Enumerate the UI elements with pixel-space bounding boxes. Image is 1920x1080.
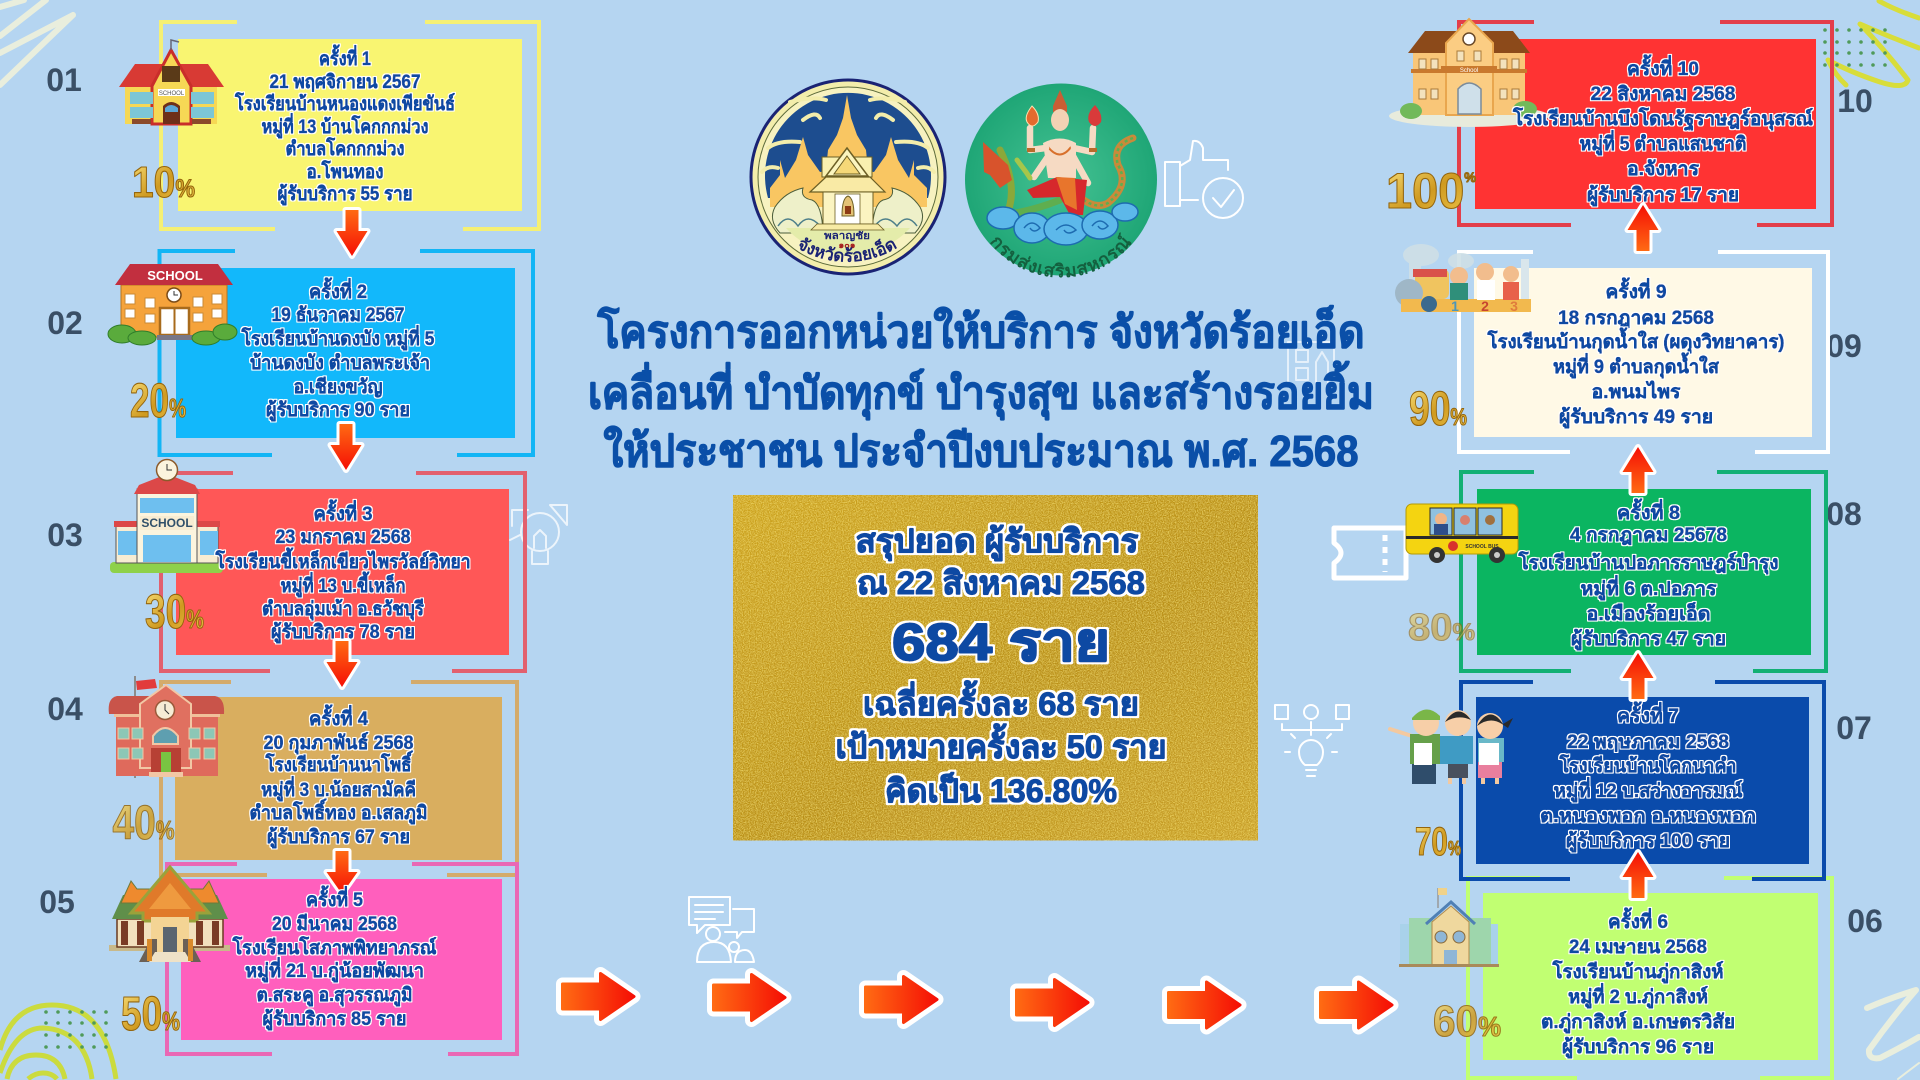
badge 40%: 40% <box>112 797 174 850</box>
badge 20%: 20% <box>130 375 186 428</box>
logo: Roi Et province seal <box>750 78 946 276</box>
title: โครงการออกหน่วยให้บริการ จังหวัดร้อยเอ็ด <box>597 305 1364 357</box>
panel 6 text: หมู่ที่ 2 บ.ภู่กาสิงห์ <box>1568 983 1708 1009</box>
icon: thumbs up with check <box>1165 141 1243 218</box>
panel 6 text <box>1541 907 1735 1059</box>
logo: Roi Et province seal: จังหวัดร้อยเอ็ด <box>800 237 897 262</box>
summary total: 684 ราย <box>892 614 1110 672</box>
logo: Roi Et province seal: พลาญชัย <box>824 230 870 242</box>
panel 2 text: โรงเรียนบ้านดงบัง หมู่ที่ 5 <box>241 325 435 351</box>
panel 2 text: 19 ธันวาคม 2567 <box>272 305 404 326</box>
panel 5 text: ผู้รับบริการ 85 ราย <box>262 1008 406 1031</box>
panel 5 text: โรงเรียนโสภาพพิทยาภรณ์ <box>232 936 437 959</box>
panel 6 text: โรงเรียนบ้านภู่กาสิงห์ <box>1552 960 1724 984</box>
number 02: 02 <box>47 305 83 341</box>
title: ให้ประชาชน ประจำปีงบประมาณ พ.ศ. 2568 <box>604 425 1358 476</box>
badge 70%: 70% <box>1415 820 1461 864</box>
panel 9 text: หมู่ที่ 9 ตำบลกุดน้ำใส <box>1553 352 1719 379</box>
number 03: 03 <box>47 517 83 553</box>
panel 9 box <box>1459 252 1828 452</box>
icon: school bus <box>1406 504 1518 563</box>
panel 2 text <box>241 277 435 422</box>
icon: train with children: 3 <box>1510 298 1518 314</box>
arrow: 6 to 7 <box>1622 852 1654 898</box>
icon: people chat <box>689 897 754 962</box>
panel 10 text <box>1512 54 1813 207</box>
panel 1 text: ครั้งที่ 1 <box>319 44 371 70</box>
panel 5 text: ต.สระคู อ.สุวรรณภูมิ <box>256 985 412 1007</box>
icon: school 1 <box>119 40 224 124</box>
arrow: right 1 <box>562 974 634 1020</box>
number 04: 04 <box>47 691 83 727</box>
panel 4 box <box>161 682 517 875</box>
panel 10 text: หมู่ที่ 5 ตำบลแสนชาติ <box>1580 130 1746 156</box>
icon: school 10 <box>1389 19 1549 127</box>
arrow: right 5 <box>1168 982 1240 1028</box>
panel 9 text: ครั้งที่ 9 <box>1606 277 1666 303</box>
badge 90%: 90% <box>1409 383 1467 436</box>
panel 6 text: ครั้งที่ 6 <box>1608 907 1668 933</box>
arrow: 3 to 4 <box>326 641 358 687</box>
panel 10 text: โรงเรียนบ้านบึงโดนรัฐราษฎร์อนุสรณ์ <box>1512 107 1813 132</box>
badge 50%: 50% <box>121 988 180 1041</box>
icon: school bus: SCHOOL BUS <box>1465 544 1499 550</box>
panel 2 box <box>160 251 533 455</box>
arrow: 2 to 3 <box>330 424 362 470</box>
icon: school 10: School <box>1460 68 1478 74</box>
panel 7 box <box>1461 682 1824 879</box>
badge 80%: 80% <box>1408 607 1475 649</box>
panel 5 box <box>167 864 517 1054</box>
number 09: 09 <box>1826 328 1862 364</box>
panel 7 text: ครั้งที่ 7 <box>1617 701 1679 727</box>
badge 100%: % <box>1464 169 1477 185</box>
icon: school 3: SCHOOL <box>141 516 193 530</box>
panel 6 text: ต.ภู่กาสิงห์ อ.เกษตรวิสัย <box>1541 1011 1735 1034</box>
panel 9 text: ผู้รับบริการ 49 ราย <box>1559 406 1713 429</box>
badge 10%: 10% <box>132 158 195 207</box>
arrow: 1 to 2 <box>336 210 368 256</box>
arrow: right 6 <box>1320 982 1392 1028</box>
badge 60%: 60% <box>1433 997 1501 1046</box>
panel 8 text: อ.เมืองร้อยเอ็ด <box>1586 601 1710 625</box>
number 08: 08 <box>1826 496 1862 532</box>
decoration: top-left scribble <box>0 0 73 85</box>
panel 1 text: ตำบลโคกกกม่วง <box>286 137 404 160</box>
panel 6 box <box>1468 878 1832 1078</box>
arrow: right 4 <box>1016 980 1088 1026</box>
panel 1 text: อ.โพนทอง <box>306 160 384 183</box>
panel 10 text: ผู้รับบริการ 17 ราย <box>1587 184 1739 207</box>
panel 8 text: 4 กรกฎาคม 25678 <box>1570 525 1727 546</box>
arrow: 8 to 9 <box>1622 447 1654 493</box>
icon: idea network <box>1275 705 1349 776</box>
panel 4 text: หมู่ที่ 3 บ.น้อยสามัคคี <box>261 776 416 802</box>
decoration: top-right scribble and dots <box>1823 1 1919 86</box>
panel 4 text: ครั้งที่ 4 <box>309 704 368 730</box>
icon: building chart <box>1288 342 1334 383</box>
arrow: 9 to 10 <box>1628 205 1658 251</box>
icon: school 4 <box>109 676 224 778</box>
panel 3 text: โรงเรียนขี้เหล็กเขียวไพรวัลย์วิทยา <box>215 547 470 573</box>
panel 3 text <box>215 499 470 644</box>
panel 8 text: โรงเรียนบ้านปอภารราษฎร์บำรุง <box>1518 551 1778 575</box>
icon: school 2 <box>108 264 237 345</box>
logo: Cooperative Promotion Department seal <box>965 84 1157 278</box>
panel 9 text: โรงเรียนบ้านกุดน้ำใส (ผดุงวิทยาคาร) <box>1487 327 1784 354</box>
decoration: bottom-right scribble <box>1867 990 1919 1079</box>
badge 100%: 100 <box>1386 163 1469 219</box>
summary text: เฉลี่ยครั้งละ 68 ราย <box>863 680 1139 722</box>
panel 5 text <box>232 885 437 1031</box>
icon: school 5 temple <box>109 867 230 962</box>
panel 7 text: ผู้รับบริการ 100 ราย <box>1566 830 1730 853</box>
summary text <box>836 523 1166 809</box>
panel 3 text: หมู่ที่ 13 บ.ขี้เหล็ก <box>280 571 406 598</box>
summary text: ณ 22 สิงหาคม 2568 <box>857 565 1145 601</box>
icon: ticket <box>1334 528 1406 578</box>
panel 7 text: 22 พฤษภาคม 2568 <box>1567 732 1729 753</box>
panel 8 text <box>1518 498 1778 651</box>
panel 10 text: 22 สิงหาคม 2568 <box>1590 84 1736 105</box>
panel 7 text <box>1540 701 1756 853</box>
number 01: 01 <box>46 62 82 98</box>
panel 1 box <box>161 22 539 229</box>
step numbers <box>39 62 1883 939</box>
panel 6 text: 24 เมษายน 2568 <box>1569 937 1707 958</box>
number 10: 10 <box>1837 83 1873 119</box>
panel 9 text: อ.พนมไพร <box>1592 380 1681 403</box>
panel 3 text: ตำบลอุ่มเม้า อ.ธวัชบุรี <box>262 598 425 621</box>
arrow: 7 to 8 <box>1622 653 1654 699</box>
icon: school children <box>1390 709 1513 784</box>
icon: school 6 <box>1399 888 1499 967</box>
panel 2 text: อ.เชียงขวัญ <box>294 376 382 398</box>
panel 1 text: 21 พฤศจิกายน 2567 <box>270 72 420 93</box>
panel 3 text: 23 มกราคม 2568 <box>276 527 410 548</box>
panel 7 text: ต.หนองพอก อ.หนองพอก <box>1540 806 1756 827</box>
panel 5 text: 20 มีนาคม 2568 <box>272 913 397 935</box>
panel 8 text: ผู้รับบริการ 47 ราย <box>1571 628 1726 651</box>
number 05: 05 <box>39 884 75 920</box>
panel 3 text: ผู้รับบริการ 78 ราย <box>271 621 415 644</box>
icon: idea bulb left <box>510 505 567 564</box>
panel 8 text: หมู่ที่ 6 ต.ปอภาร <box>1580 575 1717 601</box>
panel 4 text: ตำบลโพธิ์ทอง อ.เสลภูมิ <box>250 798 428 825</box>
panel 3 box <box>161 473 525 671</box>
panel 9 text: 18 กรกฎาคม 2568 <box>1558 308 1714 329</box>
white line icons <box>510 141 1406 962</box>
badge 30%: 30% <box>145 586 204 639</box>
panel 4 text: โรงเรียนบ้านนาโพธิ์ <box>265 750 413 776</box>
panel 5 text: ครั้งที่ 5 <box>306 885 363 911</box>
panel 4 text: 20 กุมภาพันธ์ 2568 <box>264 732 414 755</box>
panel 5 text: หมู่ที่ 21 บ.กู่น้อยพัฒนา <box>245 957 424 983</box>
panel 1 text: โรงเรียนบ้านหนองแดงเพียขันธ์ <box>234 92 455 115</box>
arrow: right 2 <box>714 974 785 1020</box>
icon: school 1: SCHOOL <box>159 91 185 97</box>
panel 8 box <box>1461 472 1826 671</box>
icon: school 2: SCHOOL <box>147 268 203 283</box>
panel 2 text: ผู้รับบริการ 90 ราย <box>266 399 410 422</box>
percent badges <box>112 158 1501 1046</box>
icon: train with children: 2 <box>1481 298 1489 314</box>
panel 4 text <box>250 704 428 849</box>
number 07: 07 <box>1836 710 1872 746</box>
panel 8 text: ครั้งที่ 8 <box>1617 498 1680 524</box>
logo: Cooperative Promotion Department seal: กรมส่งเสริมสหกรณ์ <box>990 232 1132 278</box>
panel 10 text: ครั้งที่ 10 <box>1627 54 1699 80</box>
decoration: bottom-left rings and dots <box>0 1005 116 1079</box>
panel 7 text: โรงเรียนบ้านโคกนาคำ <box>1559 754 1736 777</box>
panel 6 text: ผู้รับบริการ 96 ราย <box>1562 1036 1714 1059</box>
panel 2 text: บ้านดงบัง ตำบลพระเจ้า <box>250 352 430 374</box>
logo: Roi Et province seal: ๑๐๑ <box>839 240 856 250</box>
title: เคลื่อนที่ บำบัดทุกข์ บำรุงสุข และสร้างรอยยิ้ม <box>588 360 1374 421</box>
summary text: เป้าหมายครั้งละ 50 ราย <box>836 723 1166 765</box>
panel 3 text: ครั้งที่ 3 <box>314 499 372 525</box>
panel 2 text: ครั้งที่ 2 <box>309 277 367 303</box>
icon: train with children: 1 <box>1451 298 1459 314</box>
arrow: right 3 <box>866 976 937 1022</box>
panel 1 text <box>234 44 455 206</box>
icon: school 3 <box>110 460 223 573</box>
arrow: 4 to 5 <box>326 851 358 894</box>
number 06: 06 <box>1847 903 1883 939</box>
summary text: คิดเป็น 136.80% <box>885 771 1117 809</box>
title <box>588 305 1374 476</box>
panel 10 box <box>1459 22 1832 225</box>
panel 7 text: หมู่ที่ 12 บ.สว่างอารมณ์ <box>1554 777 1743 803</box>
panel: gold summary box <box>733 495 1258 840</box>
panel 1 text: หมู่ที่ 13 บ้านโคกกกม่วง <box>262 113 428 139</box>
panel 10 text: อ.จังหาร <box>1627 159 1700 180</box>
summary text: สรุปยอด ผู้รับบริการ <box>856 523 1138 562</box>
panel 4 text: ผู้รับบริการ 67 ราย <box>267 826 410 849</box>
panel 1 text: ผู้รับบริการ 55 ราย <box>278 183 412 206</box>
panel 9 text <box>1487 277 1784 429</box>
icon: train with children <box>1395 244 1531 314</box>
